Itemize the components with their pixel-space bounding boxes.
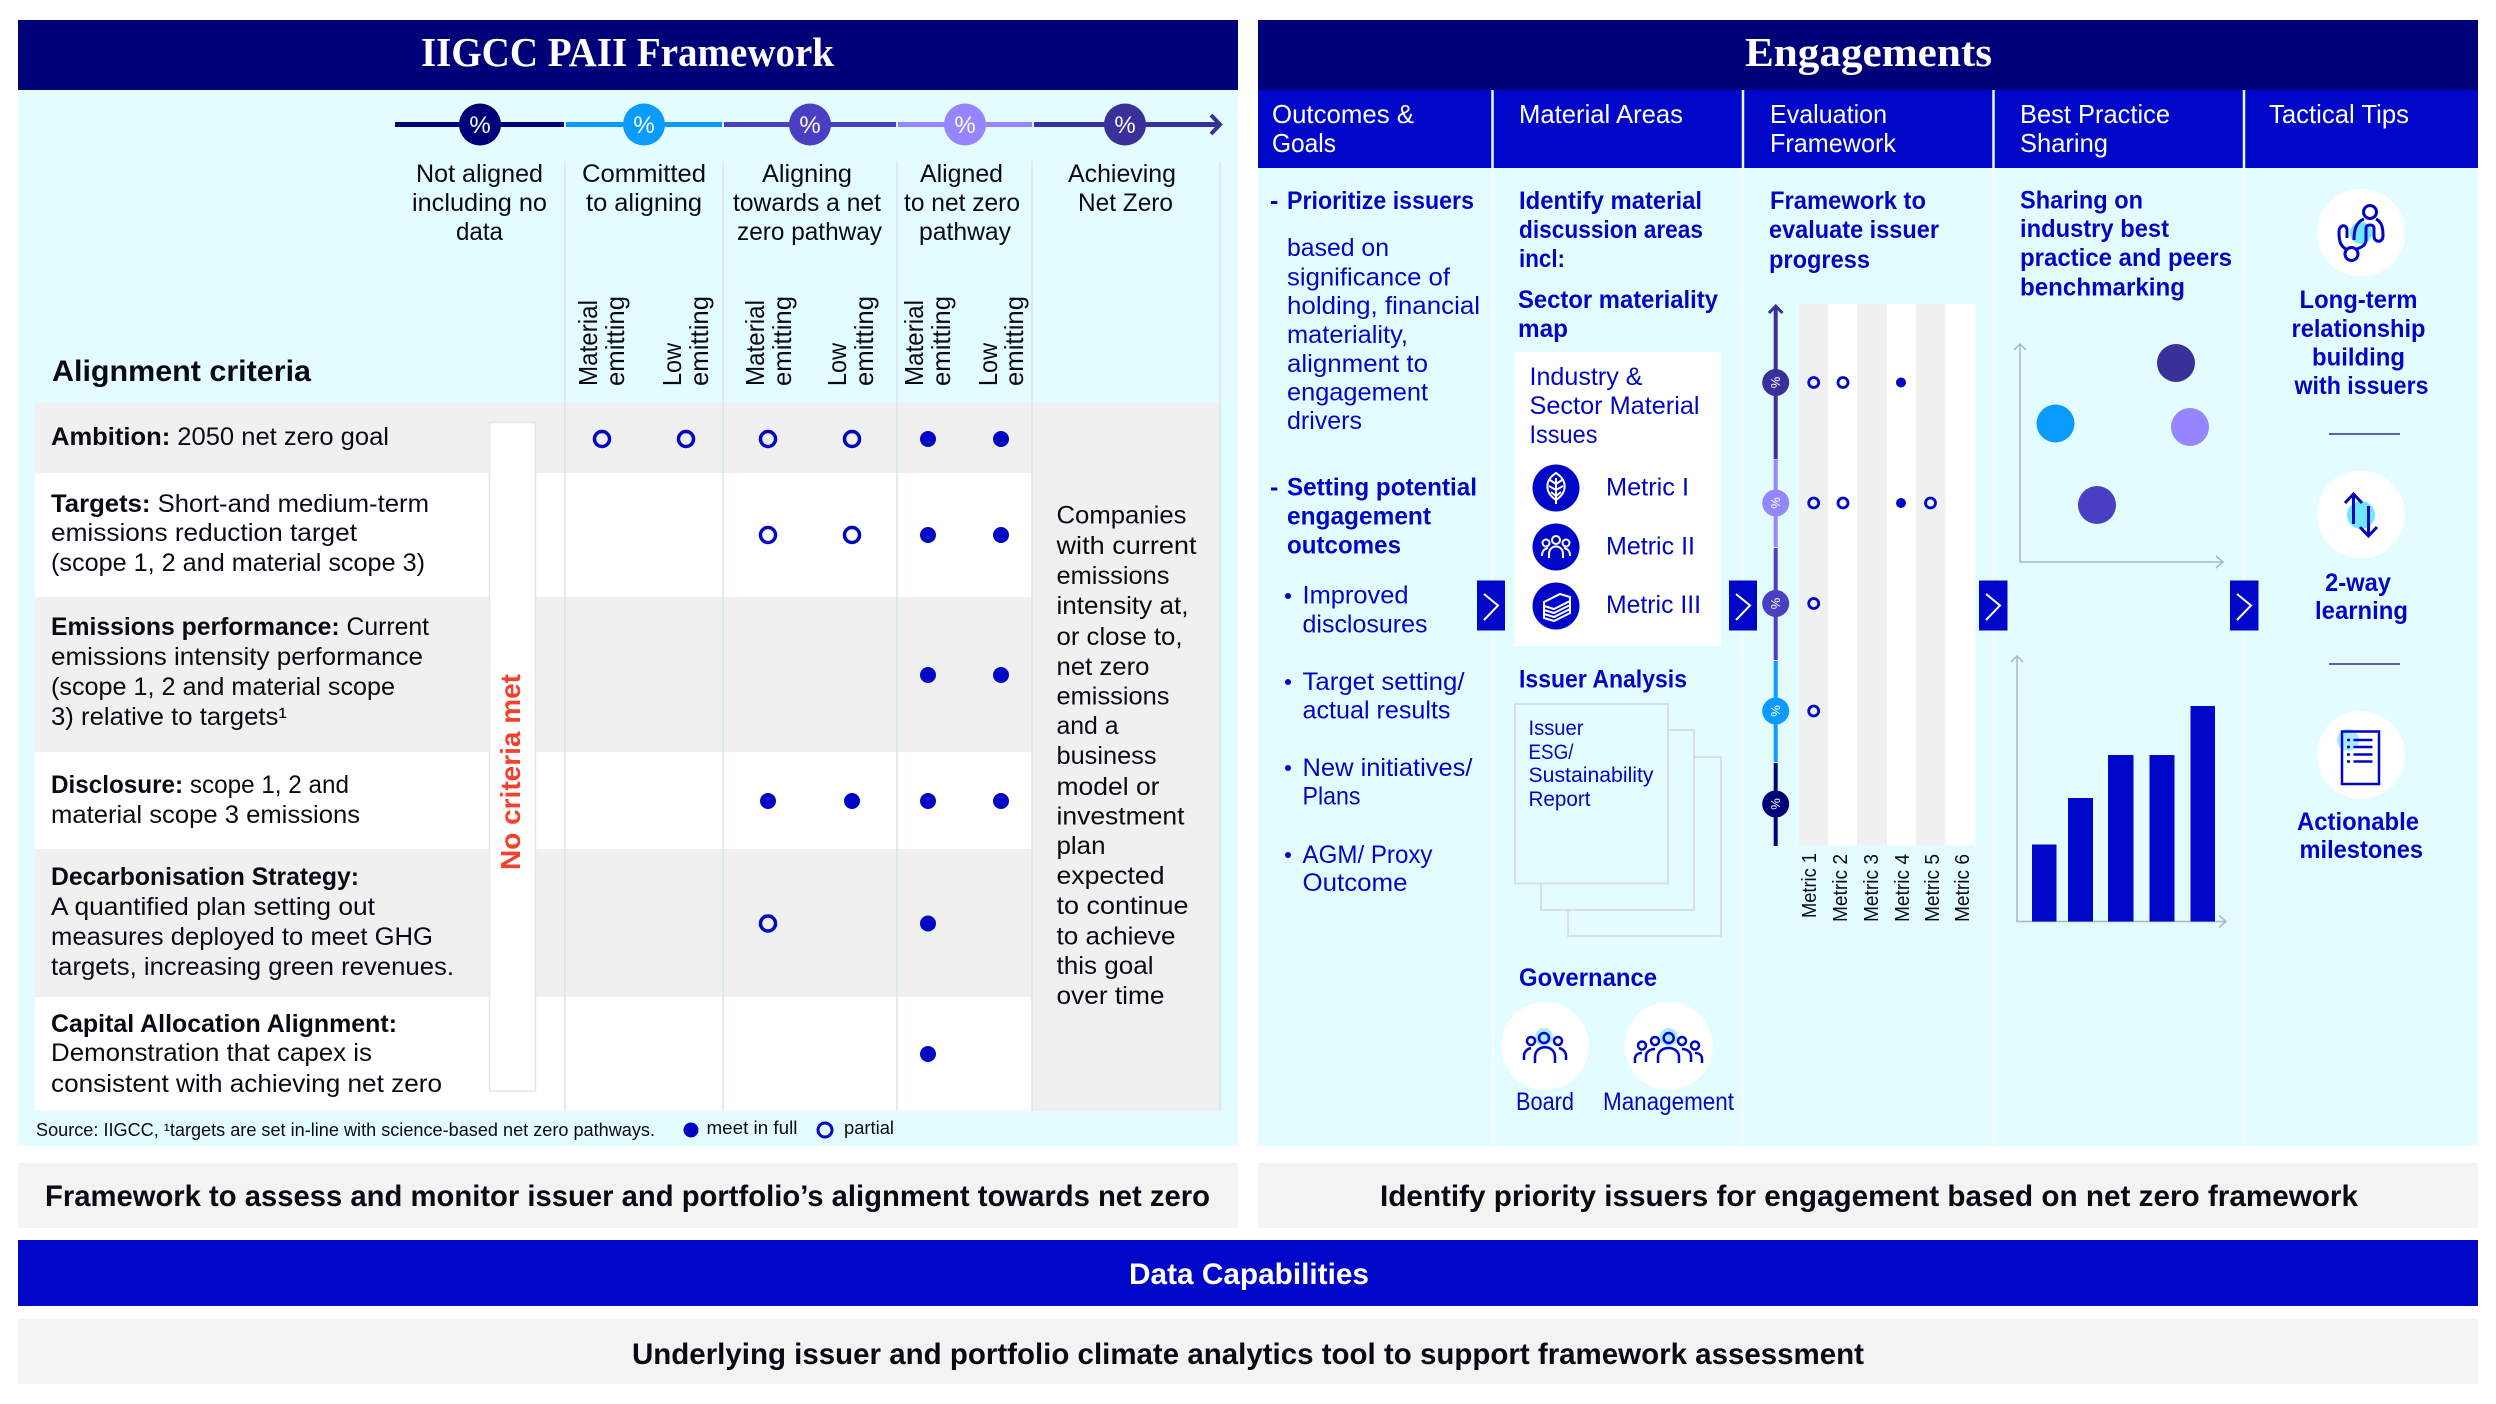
column: Best Practice Sharing: Sharing on bbox=[2020, 186, 2143, 214]
text: Achieving Net Zero description: intensity at, bbox=[1056, 592, 1188, 620]
column headers: Framework bbox=[1770, 128, 1897, 158]
stage labels: towards a net bbox=[733, 189, 881, 217]
callout: No criteria met bbox=[490, 422, 536, 1091]
banner: Data Capabilities: Data Capabilities bbox=[1129, 1258, 1369, 1291]
rotated column headers: Material bbox=[899, 300, 929, 386]
caption: framework: Framework to assess and monitor issuer and portfolio’s alignment towards net zero bbox=[45, 1180, 1210, 1213]
heading: Alignment criteria: Alignment criteria bbox=[52, 355, 311, 388]
column: Outcomes and Goals: Improved bbox=[1302, 582, 1408, 610]
card: Industry and Sector Material Issues: Sector Material bbox=[1530, 392, 1700, 420]
column: Best Practice Sharing: benchmarking bbox=[2020, 274, 2185, 302]
alignment table rows bbox=[35, 161, 1220, 1111]
metric labels bbox=[1799, 853, 1974, 922]
card: Industry and Sector Material Issues: Metric III bbox=[1606, 591, 1701, 619]
vertical progress axis: % bbox=[1768, 705, 1783, 717]
criteria text: Demonstration that capex is bbox=[51, 1039, 372, 1067]
column: Material Areas: discussion areas bbox=[1519, 216, 1703, 244]
rotated column headers: emitting bbox=[600, 296, 630, 386]
column: Outcomes and Goals: - bbox=[1270, 474, 1278, 502]
column: Material Areas: Management bbox=[1603, 1088, 1734, 1116]
rotated column headers: Low bbox=[973, 343, 1003, 386]
column: Outcomes and Goals: AGM/ Proxy bbox=[1302, 841, 1433, 869]
column: Outcomes and Goals: holding, financial bbox=[1287, 292, 1480, 320]
column: Outcomes and Goals: Setting potential bbox=[1287, 474, 1477, 502]
vertical progress axis: % bbox=[1768, 376, 1783, 388]
callout: No criteria met: No criteria met bbox=[495, 674, 526, 870]
progress timeline: % bbox=[469, 112, 491, 139]
column headers: Outcomes & bbox=[1272, 99, 1414, 129]
criteria text: Targets: Short-and medium-term bbox=[51, 490, 429, 518]
column headers: Material Areas bbox=[1519, 99, 1683, 129]
heading: Engagements bbox=[1258, 20, 2478, 90]
vertical progress axis bbox=[1762, 306, 1789, 846]
column: Tactical Tips: with issuers bbox=[2294, 372, 2428, 400]
text: Achieving Net Zero description: investment bbox=[1056, 802, 1185, 830]
criteria text: consistent with achieving net zero bbox=[51, 1070, 442, 1098]
icon: Management bbox=[1625, 1002, 1713, 1090]
legend bbox=[684, 1118, 894, 1138]
panel: IIGCC PAII Framework bbox=[18, 20, 1238, 1146]
heading: Engagements: Engagements bbox=[1745, 29, 1992, 75]
column: Evaluation Framework: evaluate issuer bbox=[1769, 216, 1939, 244]
icon: leaf bbox=[1532, 464, 1580, 512]
stage labels: to aligning bbox=[586, 189, 702, 217]
banner: Data Capabilities bbox=[18, 1240, 2478, 1306]
stage labels: Aligning bbox=[762, 160, 852, 188]
text: Achieving Net Zero description: emissions bbox=[1056, 562, 1170, 590]
column: Material Areas: Board bbox=[1516, 1088, 1574, 1116]
stage labels: Aligned bbox=[920, 160, 1003, 188]
column: Best Practice Sharing: practice and peers bbox=[2020, 244, 2232, 272]
text: Achieving Net Zero description: this goal bbox=[1056, 952, 1154, 980]
text: Achieving Net Zero description: expected bbox=[1056, 862, 1164, 890]
report stack: Report bbox=[1528, 788, 1591, 811]
rotated column headers: emitting bbox=[684, 296, 714, 386]
text: Achieving Net Zero description: Companies bbox=[1056, 502, 1186, 530]
progress timeline: % bbox=[799, 112, 821, 139]
column: Tactical Tips: learning bbox=[2315, 597, 2408, 625]
card: Industry and Sector Material Issues: Industry & bbox=[1530, 363, 1643, 391]
column: Tactical Tips: Actionable bbox=[2297, 808, 2419, 836]
stage labels: Achieving bbox=[1068, 160, 1176, 188]
caption: data capabilities: Underlying issuer and portfolio climate analytics tool to support framework assessment bbox=[632, 1338, 1864, 1371]
caption: engagements bbox=[1258, 1163, 2478, 1228]
column: Tactical Tips: Long-term bbox=[2300, 286, 2418, 314]
column: Evaluation Framework: Framework to bbox=[1770, 187, 1926, 215]
text: Achieving Net Zero description: and a bbox=[1056, 712, 1119, 740]
rotated column headers bbox=[573, 296, 1029, 386]
rotated column headers: emitting bbox=[849, 296, 879, 386]
stage labels: including no bbox=[412, 189, 547, 217]
column: Tactical Tips: 2-way bbox=[2325, 569, 2391, 597]
icon: relationship bbox=[2317, 188, 2405, 276]
icon: Board bbox=[1501, 1002, 1589, 1090]
rotated column headers: Material bbox=[740, 300, 770, 386]
progress timeline: % bbox=[954, 112, 976, 139]
report stack: Sustainability bbox=[1528, 764, 1654, 787]
column headers bbox=[1258, 90, 2478, 168]
criteria text: A quantified plan setting out bbox=[51, 893, 375, 921]
column: Outcomes and Goals: outcomes bbox=[1287, 532, 1401, 560]
column headers: Sharing bbox=[2020, 128, 2108, 158]
criteria text: targets, increasing green revenues. bbox=[51, 953, 454, 981]
column: Material Areas: Sector materiality bbox=[1518, 286, 1718, 314]
icon: milestones document bbox=[2317, 711, 2405, 799]
column: Outcomes and Goals: materiality, bbox=[1287, 321, 1408, 349]
metric labels: Metric 5 bbox=[1922, 854, 1944, 922]
text: Achieving Net Zero description: model or bbox=[1056, 773, 1160, 801]
card: Industry and Sector Material Issues: Metric II bbox=[1606, 532, 1695, 560]
column headers: Tactical Tips bbox=[2269, 99, 2409, 129]
caption: data capabilities bbox=[18, 1319, 2478, 1384]
icon: two-way arrows bbox=[2317, 470, 2405, 558]
column: Material Areas: Identify material bbox=[1519, 187, 1702, 215]
column: Evaluation Framework bbox=[1762, 187, 1975, 922]
stage labels: Committed bbox=[582, 160, 706, 188]
legend: partial bbox=[844, 1118, 894, 1138]
criteria text: (scope 1, 2 and material scope bbox=[51, 673, 395, 701]
column: Best Practice Sharing: industry best bbox=[2020, 215, 2170, 243]
text: Achieving Net Zero description bbox=[1055, 502, 1197, 1010]
progress timeline: % bbox=[633, 112, 655, 139]
arrow: step chevrons bbox=[1477, 580, 2258, 630]
progress timeline bbox=[395, 104, 1220, 146]
card: Industry and Sector Material Issues bbox=[1514, 352, 1721, 646]
metric stripes bbox=[1799, 304, 1975, 845]
column: Outcomes and Goals: engagement bbox=[1287, 378, 1428, 406]
report stack: ESG/ bbox=[1528, 741, 1574, 764]
icon: books bbox=[1532, 582, 1580, 630]
metric dots bbox=[1809, 378, 1936, 716]
report stack: Issuer bbox=[1528, 717, 1584, 740]
column: Tactical Tips: milestones bbox=[2300, 836, 2423, 864]
column: Outcomes and Goals: disclosures bbox=[1302, 610, 1428, 638]
caption: framework bbox=[18, 1163, 1238, 1228]
text: Achieving Net Zero description: with current bbox=[1055, 532, 1197, 560]
criteria text: emissions reduction target bbox=[51, 519, 357, 547]
vertical progress axis: % bbox=[1768, 798, 1783, 810]
column: Outcomes and Goals bbox=[1270, 187, 1480, 897]
column: Outcomes and Goals: significance of bbox=[1287, 264, 1450, 292]
dot matrix bbox=[594, 431, 1009, 1062]
text: Achieving Net Zero description: emissions bbox=[1056, 682, 1170, 710]
criteria text: Capital Allocation Alignment: bbox=[51, 1010, 397, 1038]
criteria text: 3) relative to targets¹ bbox=[51, 703, 287, 731]
column: Material Areas: incl: bbox=[1519, 245, 1565, 273]
column: Outcomes and Goals: drivers bbox=[1287, 407, 1362, 435]
column: Material Areas: Issuer Analysis bbox=[1519, 666, 1687, 694]
column: Tactical Tips: relationship bbox=[2292, 315, 2426, 343]
column headers: Best Practice bbox=[2020, 99, 2170, 129]
column: Material Areas: map bbox=[1518, 315, 1568, 343]
column: Evaluation Framework: progress bbox=[1769, 246, 1870, 274]
criteria text: emissions intensity performance bbox=[51, 643, 423, 671]
progress timeline: % bbox=[1114, 112, 1136, 139]
criteria text: Ambition: 2050 net zero goal bbox=[51, 423, 389, 451]
vertical progress axis: % bbox=[1768, 497, 1783, 509]
column: Tactical Tips: building bbox=[2312, 344, 2405, 372]
column: Best Practice Sharing bbox=[2011, 186, 2232, 928]
stage labels: data bbox=[456, 218, 503, 246]
text: Achieving Net Zero description: or close to, bbox=[1056, 623, 1182, 651]
caption: engagements: Identify priority issuers for engagement based on net zero framework bbox=[1380, 1180, 2358, 1213]
column: Outcomes and Goals: engagement bbox=[1287, 502, 1432, 530]
column: Tactical Tips bbox=[2292, 188, 2428, 864]
report stack bbox=[1515, 704, 1721, 936]
stage labels: to net zero bbox=[904, 189, 1020, 217]
column: Outcomes and Goals: alignment to bbox=[1287, 350, 1428, 378]
vertical progress axis: % bbox=[1768, 597, 1783, 609]
icon: people bbox=[1532, 524, 1580, 570]
column headers: Goals bbox=[1272, 128, 1336, 158]
text: Achieving Net Zero description: net zero bbox=[1056, 653, 1150, 681]
rotated column headers: emitting bbox=[767, 296, 797, 386]
stage labels: Net Zero bbox=[1078, 189, 1173, 217]
heading: IIGCC PAII Framework bbox=[18, 20, 1238, 90]
metric labels: Metric 6 bbox=[1952, 854, 1974, 922]
rotated column headers: Low bbox=[822, 343, 852, 386]
column headers: Evaluation bbox=[1770, 99, 1887, 129]
stage labels: pathway bbox=[919, 218, 1011, 246]
column: Outcomes and Goals: New initiatives/ bbox=[1302, 754, 1473, 782]
rotated column headers: emitting bbox=[999, 296, 1029, 386]
stage labels bbox=[412, 160, 1176, 246]
metric labels: Metric 4 bbox=[1892, 854, 1914, 922]
column: Outcomes and Goals: - bbox=[1270, 187, 1278, 215]
metric labels: Metric 2 bbox=[1830, 854, 1852, 922]
legend: meet in full bbox=[706, 1118, 798, 1138]
text: Achieving Net Zero description: to achieve bbox=[1056, 922, 1176, 950]
stage labels: zero pathway bbox=[737, 218, 882, 246]
column: Outcomes and Goals: Prioritize issuers bbox=[1287, 187, 1474, 215]
panel: Engagements bbox=[1258, 20, 2478, 1146]
text: Achieving Net Zero description: plan bbox=[1056, 832, 1106, 860]
text: Achieving Net Zero description: business bbox=[1056, 742, 1156, 770]
card: Industry and Sector Material Issues: Metric I bbox=[1606, 474, 1689, 502]
rotated column headers: Low bbox=[657, 343, 687, 386]
metric labels: Metric 3 bbox=[1861, 854, 1883, 922]
criteria text: Emissions performance: Current bbox=[51, 613, 429, 641]
source note: Source: IIGCC, ¹targets are set in-line with science-based net zero pathways. bbox=[36, 1120, 655, 1140]
rotated column headers: Material bbox=[573, 300, 603, 386]
criteria text bbox=[51, 423, 454, 1098]
criteria text: Decarbonisation Strategy: bbox=[51, 863, 359, 891]
metric labels: Metric 1 bbox=[1799, 853, 1821, 918]
stage labels: Not aligned bbox=[416, 160, 543, 188]
criteria text: Disclosure: scope 1, 2 and bbox=[51, 771, 349, 799]
text: Achieving Net Zero description: to continue bbox=[1056, 892, 1188, 920]
bar chart bbox=[2011, 656, 2226, 928]
column: Outcomes and Goals: based on bbox=[1287, 234, 1389, 262]
heading: IIGCC PAII Framework: IIGCC PAII Framework bbox=[421, 29, 834, 75]
scatter chart bbox=[2014, 344, 2223, 568]
criteria text: measures deployed to meet GHG bbox=[51, 923, 433, 951]
column: Outcomes and Goals: actual results bbox=[1302, 696, 1450, 724]
criteria text: material scope 3 emissions bbox=[51, 801, 360, 829]
column: Material Areas: Governance bbox=[1519, 964, 1657, 992]
column: Outcomes and Goals: Target setting/ bbox=[1302, 668, 1465, 696]
column: Outcomes and Goals: Outcome bbox=[1302, 869, 1408, 897]
card: Industry and Sector Material Issues: Issues bbox=[1530, 421, 1598, 449]
column: Outcomes and Goals: Plans bbox=[1302, 782, 1360, 810]
text: Achieving Net Zero description: over time bbox=[1056, 982, 1164, 1010]
criteria text: (scope 1, 2 and material scope 3) bbox=[51, 549, 425, 577]
rotated column headers: emitting bbox=[926, 296, 956, 386]
column: Material Areas bbox=[1501, 187, 1734, 1116]
